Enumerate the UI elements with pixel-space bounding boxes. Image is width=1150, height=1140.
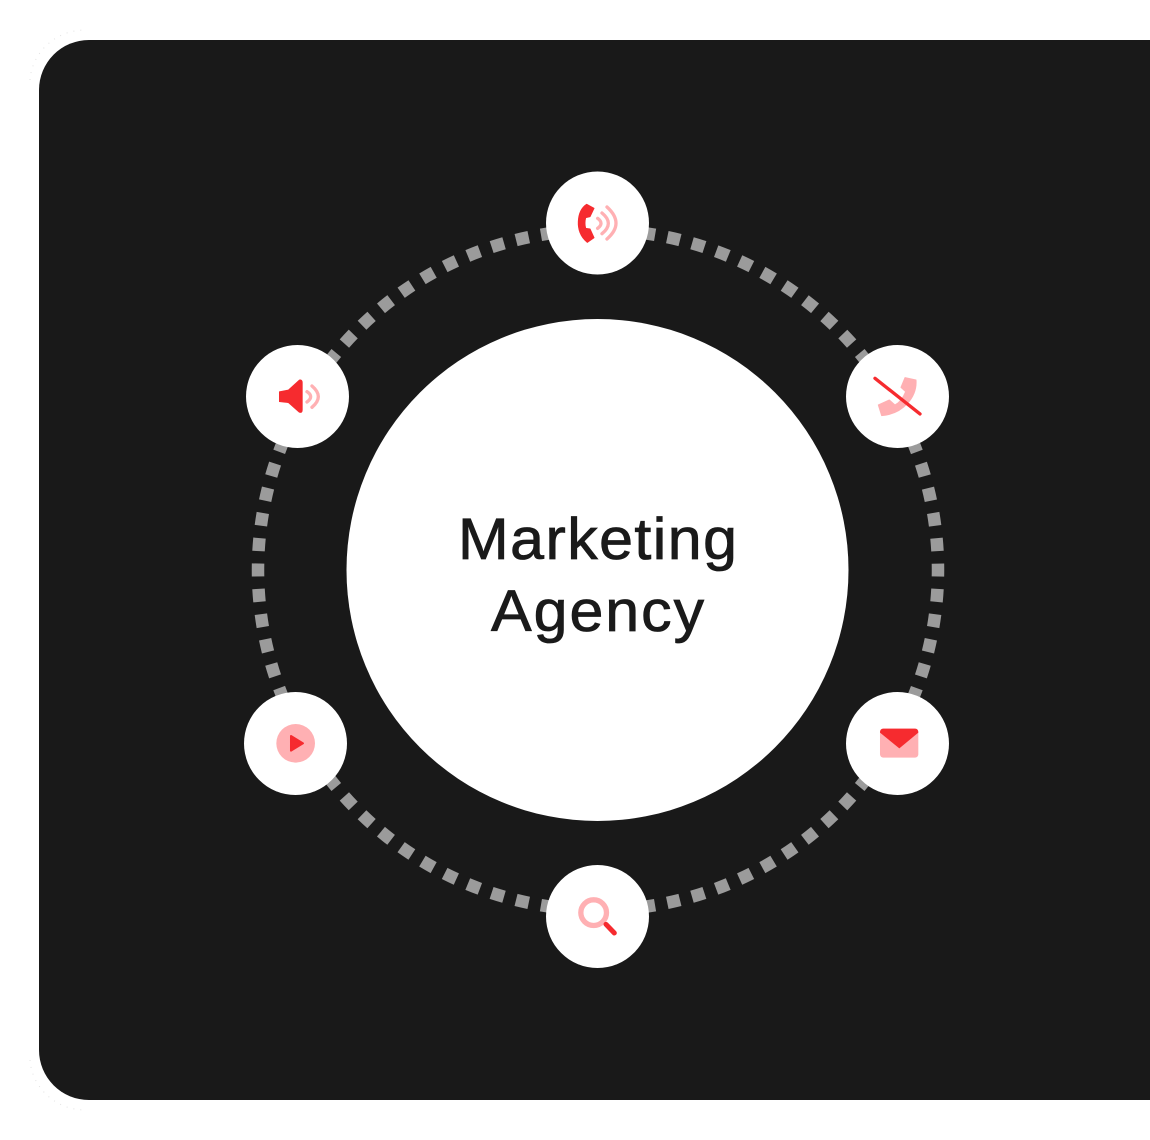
node: muted phone	[846, 345, 949, 448]
title	[458, 506, 737, 644]
dotted ring	[258, 230, 938, 910]
node: email	[846, 692, 949, 795]
central circle with title	[346, 319, 848, 821]
node: search	[546, 865, 649, 968]
icon: play button	[276, 724, 315, 763]
central white circle	[346, 319, 848, 821]
icon: muted phone	[875, 378, 920, 416]
node: speaker	[246, 345, 349, 448]
node: ringing phone	[546, 172, 649, 274]
node: video	[244, 692, 347, 795]
title: Marketing	[458, 506, 737, 572]
icon: ringing phone	[578, 204, 616, 242]
icon: magnifier	[581, 900, 614, 933]
icon: speaker	[279, 380, 318, 413]
icon: envelope	[880, 729, 918, 758]
title: Agency	[491, 578, 704, 644]
